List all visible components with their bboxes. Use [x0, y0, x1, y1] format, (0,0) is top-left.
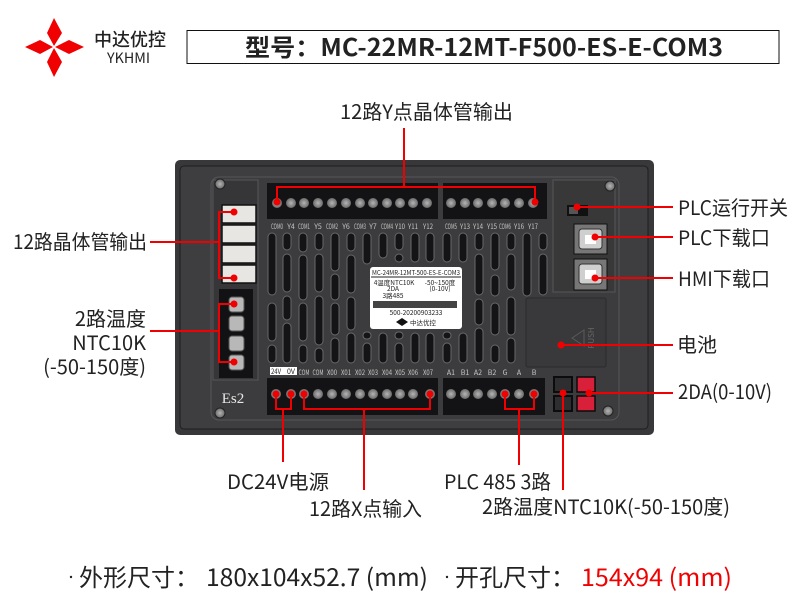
top terminal labels: Y10	[394, 222, 405, 232]
top-left terminal block	[267, 183, 438, 219]
callout: PLC下载口: PLC下载口	[678, 222, 770, 251]
top terminal labels: Y13	[459, 222, 470, 232]
ventilation slots	[268, 233, 547, 363]
bottom terminal labels: A1	[447, 368, 455, 378]
top terminal labels: COM1	[298, 222, 310, 232]
callout: 12路X点输入	[300, 390, 434, 522]
left connector bay	[213, 180, 258, 380]
callout: 12路Y点晶体管输出	[274, 96, 538, 206]
top terminal labels: Y5	[313, 222, 322, 232]
dimensions footer: 开孔尺寸：	[455, 558, 575, 593]
terminal screws	[271, 198, 539, 399]
battery cover	[526, 298, 606, 367]
callout: PLC运行开关	[574, 192, 788, 221]
callout: 2DA: 2DA(0-10V)	[678, 376, 772, 405]
callout: 电池: 电池	[677, 329, 717, 358]
white connectors	[222, 205, 256, 283]
right port bay	[553, 180, 615, 292]
USB port: PLC	[574, 224, 607, 254]
bottom terminal labels: A	[517, 368, 522, 378]
callout: PLC下载口	[592, 222, 770, 251]
spec label: 500-20200903233	[390, 307, 443, 317]
bottom terminal labels: G	[503, 368, 508, 378]
top terminal labels: Y12	[422, 222, 433, 232]
callout: 2路温度 NTC10K	[43, 300, 238, 380]
callout: HMI下载口	[592, 263, 770, 292]
dimensions footer: 154x94 (mm)	[581, 558, 732, 593]
Es2 mark: Es2	[222, 391, 244, 407]
icon: red four-diamond mark	[25, 18, 84, 77]
top terminal labels: COM3	[354, 222, 366, 232]
bottom terminal labels: X05	[395, 368, 405, 378]
spec label: (0-10V)	[429, 283, 451, 293]
bottom terminal labels: X03	[368, 368, 378, 378]
top terminal labels: COM0	[271, 222, 283, 232]
bottom terminal labels: X02	[355, 368, 365, 378]
bottom terminal labels: A2	[474, 368, 482, 378]
temperature terminal block	[219, 289, 253, 378]
callout: 2路温度 NTC10K: NTC10K	[72, 327, 146, 356]
top terminal labels: Y7	[368, 222, 377, 232]
spec label: -50~150度	[425, 277, 456, 287]
callout: 2路温度NTC10K: 2路温度NTC10K(-50-150度)	[482, 491, 730, 520]
top terminal labels: COM6	[499, 222, 511, 232]
callout: 电池	[558, 329, 717, 358]
callout: 12路Y点晶体管输出: 12路Y点晶体管输出	[340, 96, 513, 125]
callout: PLC运行开关: PLC运行开关	[678, 192, 788, 221]
callout: DC24V电源: DC24V电源	[227, 466, 329, 495]
bottom terminal labels: B2	[488, 368, 496, 378]
bottom terminal labels: COM	[298, 368, 310, 378]
callout: 2路温度 NTC10K: (-50-150度)	[43, 351, 146, 380]
callout: 2路温度 NTC10K: 2路温度	[75, 303, 146, 332]
bottom terminal labels: X01	[341, 368, 351, 378]
bottom terminal labels: COM	[312, 368, 324, 378]
top terminal labels: Y14	[472, 222, 483, 232]
bottom-left terminal block	[267, 378, 438, 415]
dimensions footer	[70, 558, 732, 593]
bottom terminal labels: B1	[461, 368, 469, 378]
black sockets	[554, 377, 572, 411]
spec label: MC-24MR-12MT-500-ES-E-COM3	[372, 267, 460, 277]
top terminal labels: Y6	[341, 222, 350, 232]
bottom-right terminal block	[443, 378, 545, 415]
top terminal labels	[271, 222, 538, 232]
callout: HMI下载口: HMI下载口	[678, 263, 770, 292]
bottom terminal labels: X04	[382, 368, 392, 378]
top terminal labels: Y17	[527, 222, 538, 232]
USB port: HMI	[574, 259, 607, 290]
top terminal labels: Y4	[286, 222, 295, 232]
bottom terminal labels: 24V	[271, 367, 282, 377]
spec label: 2DA	[387, 283, 399, 293]
bottom terminal labels: X06	[408, 368, 418, 378]
battery cover: PUSH	[586, 327, 597, 349]
top terminal labels: Y16	[513, 222, 524, 232]
top terminal labels: COM2	[326, 222, 338, 232]
callout: PLC 485 3路: PLC 485 3路	[444, 466, 551, 495]
callout: 2DA	[586, 376, 772, 405]
dimensions footer: 180x104x52.7 (mm)	[206, 558, 428, 593]
spec label: 中达优控	[410, 317, 436, 327]
callout: PLC 485 3路	[444, 390, 551, 495]
red sockets	[577, 377, 595, 411]
bottom terminal labels	[270, 367, 537, 378]
bottom terminal labels: X00	[327, 368, 337, 378]
top terminal labels: COM4	[381, 222, 393, 232]
model title box: 型号：MC-22MR-12MT-F500-ES-E-COM3	[245, 28, 723, 63]
callout: 12路晶体管输出	[13, 208, 238, 282]
spec label: 4温度NTC10K	[374, 277, 415, 287]
company name: 中达优控	[94, 26, 166, 52]
corner screws	[215, 179, 615, 418]
logo	[25, 18, 166, 77]
mode switch	[567, 205, 588, 216]
callout: DC24V电源	[227, 390, 329, 495]
bottom terminal labels: B	[532, 368, 537, 378]
callout: 12路晶体管输出: 12路晶体管输出	[13, 226, 147, 255]
company latin name: YKHMI	[106, 48, 150, 68]
callout: 2路温度NTC10K	[482, 390, 730, 520]
top terminal labels: COM5	[445, 222, 457, 232]
bottom terminal labels: X07	[423, 368, 433, 378]
top terminal labels: Y15	[486, 222, 497, 232]
dimensions footer: 外形尺寸：	[79, 558, 199, 593]
spec label: 3路485	[383, 290, 404, 300]
panel: device rear	[175, 160, 654, 435]
top-right terminal block	[443, 183, 547, 219]
top terminal labels: Y11	[407, 222, 418, 232]
bottom terminal labels: 0V	[287, 367, 296, 377]
callout: 12路X点输入: 12路X点输入	[309, 493, 422, 522]
spec label	[370, 267, 462, 329]
